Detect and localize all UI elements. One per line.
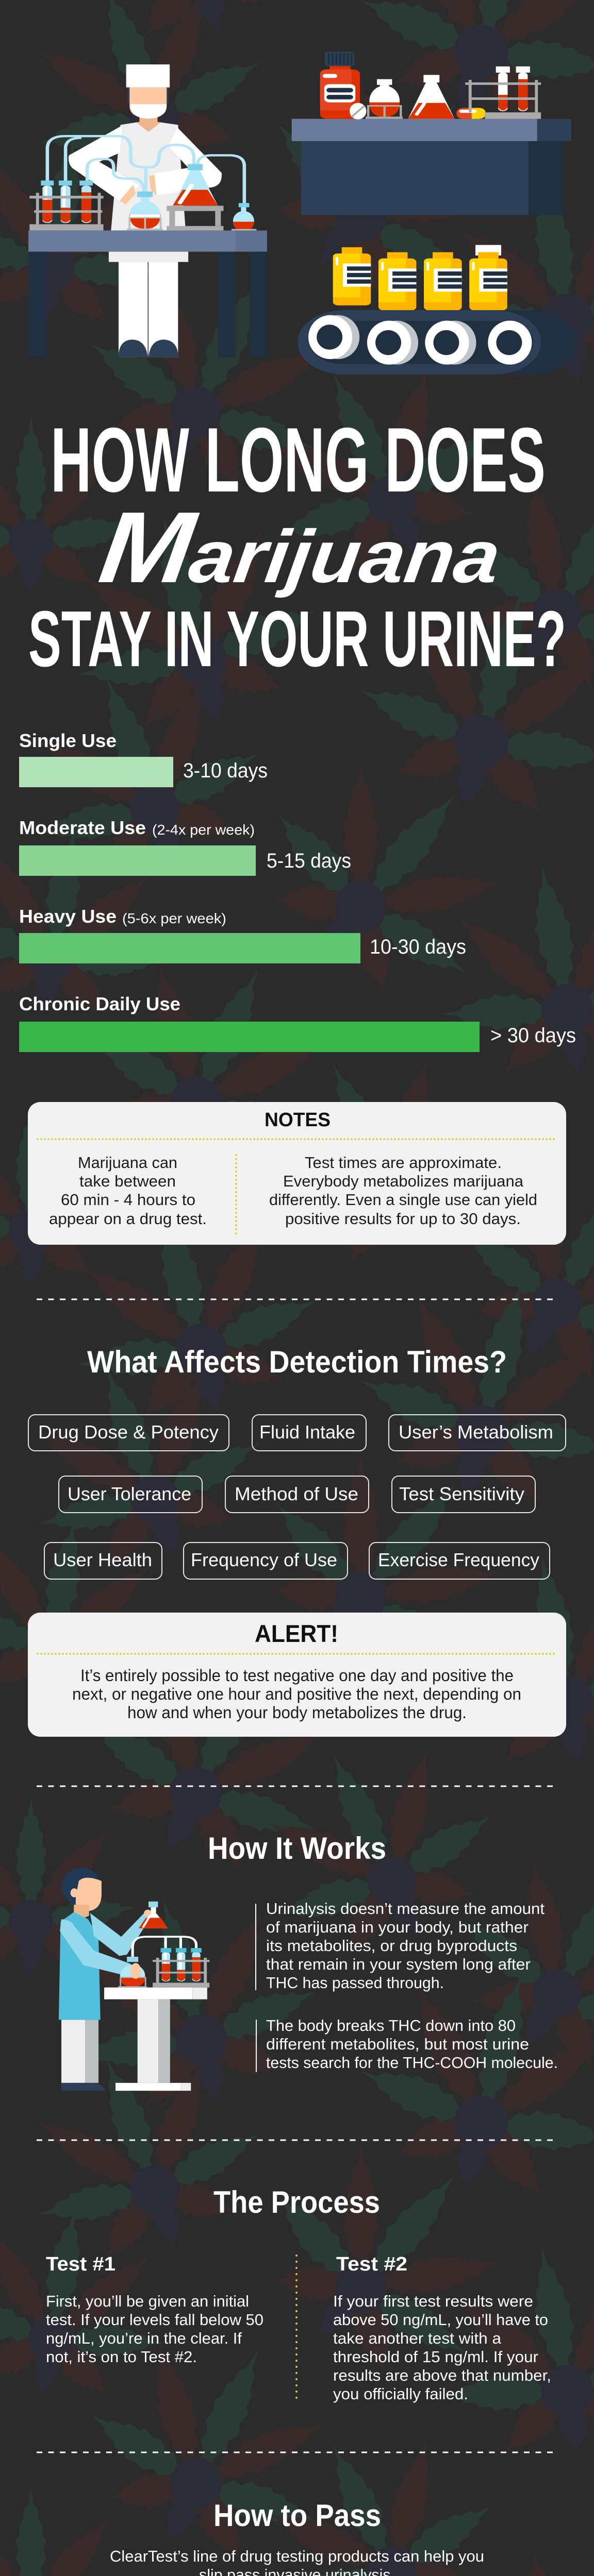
text: urinalysis explanation: that remain in your system long after [266, 1955, 531, 1973]
text: approximations: Everybody metabolizes marijuana [283, 1172, 524, 1190]
chip: user's metabolism: User’s Metabolism [399, 1421, 553, 1443]
panel: test 2: Test #2 [336, 2253, 407, 2275]
panel: test 2: you officially failed. [333, 2385, 468, 2403]
bar: single use: Single Use [19, 730, 117, 751]
bar: heavy use: Heavy Use [19, 906, 117, 927]
heading: alert: ALERT! [255, 1620, 338, 1647]
icon: raised flask [139, 1902, 168, 1928]
text: urinalysis explanation: Urinalysis doesn’t measure the amount [266, 1900, 544, 1918]
chip: method of use: Method of Use [235, 1483, 358, 1504]
heading: how to pass: How to Pass [213, 2498, 381, 2533]
heading: what affects detection times: What Affects Detection Times? [87, 1345, 507, 1379]
text: onset time: Marijuana can [78, 1154, 177, 1172]
text: approximations: Test times are approximate. [305, 1154, 502, 1172]
icon: capsule [456, 108, 486, 119]
bar: moderate use [19, 817, 351, 876]
text: cleartest intro: ClearTest’s line of drug testing products can help you [110, 2547, 484, 2565]
text: onset time: take between [79, 1172, 176, 1190]
lab equipment on left table [29, 136, 256, 231]
panel: test 2: take another test with a [333, 2329, 502, 2347]
chip: test sensitivity [392, 1476, 535, 1513]
chip: user tolerance: User Tolerance [68, 1483, 191, 1504]
text: urinalysis explanation [255, 1900, 544, 1992]
chip: user tolerance [59, 1476, 202, 1513]
heading: notes: NOTES [265, 1109, 331, 1131]
panel: test 1: test. If your levels fall below 50 [46, 2311, 263, 2329]
bar: single use [19, 730, 268, 787]
text: approximations: differently. Even a single use can yield [269, 1191, 537, 1209]
panel: test 2: above 50 ng/mL, you’ll have to [333, 2311, 548, 2329]
icon: scientist with flasks [59, 1868, 209, 2091]
panel: test 1 [46, 2253, 263, 2366]
text: onset time: 60 min - 4 hours to [61, 1191, 195, 1209]
chip: drug dose and potency [28, 1415, 229, 1451]
title [28, 409, 566, 683]
heading: how it works: How It Works [208, 1831, 386, 1866]
chip: user health [44, 1543, 162, 1579]
chip: frequency of use [184, 1543, 348, 1579]
icon: test tube apparatus [118, 1937, 209, 1988]
heading: the process: The Process [213, 2185, 380, 2219]
chip: method of use [225, 1476, 369, 1513]
title: M [93, 491, 203, 604]
bar: chronic daily use [19, 993, 576, 1052]
text: onset time: appear on a drug test. [49, 1210, 207, 1228]
text: approximations: positive results for up to 30 days. [285, 1210, 521, 1228]
bar: heavy use [19, 906, 466, 963]
icon: test tube rack [465, 66, 541, 119]
left lab table [28, 230, 267, 357]
panel: test 1: ng/mL, you’re in the clear. If [46, 2329, 242, 2347]
text: THC metabolites [256, 2016, 558, 2072]
bar: moderate use: Moderate Use [19, 817, 146, 838]
panel: test 2: results are above that number, [333, 2366, 551, 2384]
chip: user's metabolism [389, 1415, 566, 1451]
panel: test 1: First, you’ll be given an initial [46, 2292, 249, 2310]
icon: red medicine bottle and pill [320, 52, 366, 120]
text: alert body: next, or negative one hour and positive the next, depending on [72, 1685, 521, 1703]
hero illustration: lab scene [28, 52, 578, 375]
text: onset time [49, 1154, 207, 1228]
chip: frequency of use: Frequency of Use [191, 1549, 337, 1570]
text: alert body [72, 1666, 521, 1722]
panel: alert [28, 1613, 566, 1737]
text: THC metabolites: different metabolites, but most urine [266, 2035, 529, 2053]
icon: conical flask [408, 75, 455, 119]
bar: moderate use: 5-15 days [267, 850, 351, 872]
text: urinalysis explanation: of marijuana in your body, but rather [266, 1918, 529, 1936]
panel: test 1: Test #1 [46, 2253, 116, 2275]
chip: exercise frequency: Exercise Frequency [378, 1549, 539, 1570]
panel: notes [28, 1102, 566, 1245]
chip: fluid intake [252, 1415, 366, 1451]
chip: drug dose and potency: Drug Dose & Potency [38, 1421, 219, 1443]
icon: lab technician at table [69, 64, 222, 357]
panel: test 2: If your first test results were [333, 2292, 533, 2310]
right counter [292, 119, 571, 215]
text: THC metabolites: The body breaks THC down into 80 [266, 2016, 516, 2035]
chip: user health: User Health [53, 1549, 152, 1570]
bar: heavy use: (5-6x per week) [122, 910, 226, 926]
title: arijuana [185, 515, 505, 598]
text: THC metabolites: tests search for the THC-COOH molecule. [266, 2054, 558, 2072]
bar: moderate use: (2-4x per week) [152, 822, 255, 838]
bar: single use: 3-10 days [183, 759, 268, 782]
panel: test 1: not, it’s on to Test #2. [46, 2348, 197, 2366]
factor chips [28, 1415, 566, 1579]
bar: chronic daily use: Chronic Daily Use [19, 993, 180, 1014]
panel: test 2 [333, 2253, 551, 2403]
bar: chronic daily use: > 30 days [490, 1024, 576, 1047]
bar: heavy use: 10-30 days [370, 936, 466, 958]
bar chart: detection time by use [19, 730, 576, 1052]
panel: test 2: threshold of 15 ng/ml. If your [333, 2348, 538, 2366]
icon: four yellow bottles [333, 245, 507, 310]
chip: exercise frequency [369, 1543, 550, 1579]
text: approximations [269, 1154, 537, 1228]
text: alert body: It’s entirely possible to test negative one day and positive the [80, 1666, 514, 1685]
chip: test sensitivity: Test Sensitivity [399, 1483, 524, 1504]
text: alert body: how and when your body metabolizes the drug. [127, 1703, 467, 1722]
chip: fluid intake: Fluid Intake [259, 1421, 355, 1443]
text: urinalysis explanation: its metabolites, or drug byproducts [266, 1937, 517, 1955]
icon: conveyor belt [298, 310, 578, 375]
text: urinalysis explanation: THC has passed through. [266, 1974, 444, 1992]
text: cleartest intro [110, 2547, 484, 2576]
icon: round flask [366, 79, 403, 119]
